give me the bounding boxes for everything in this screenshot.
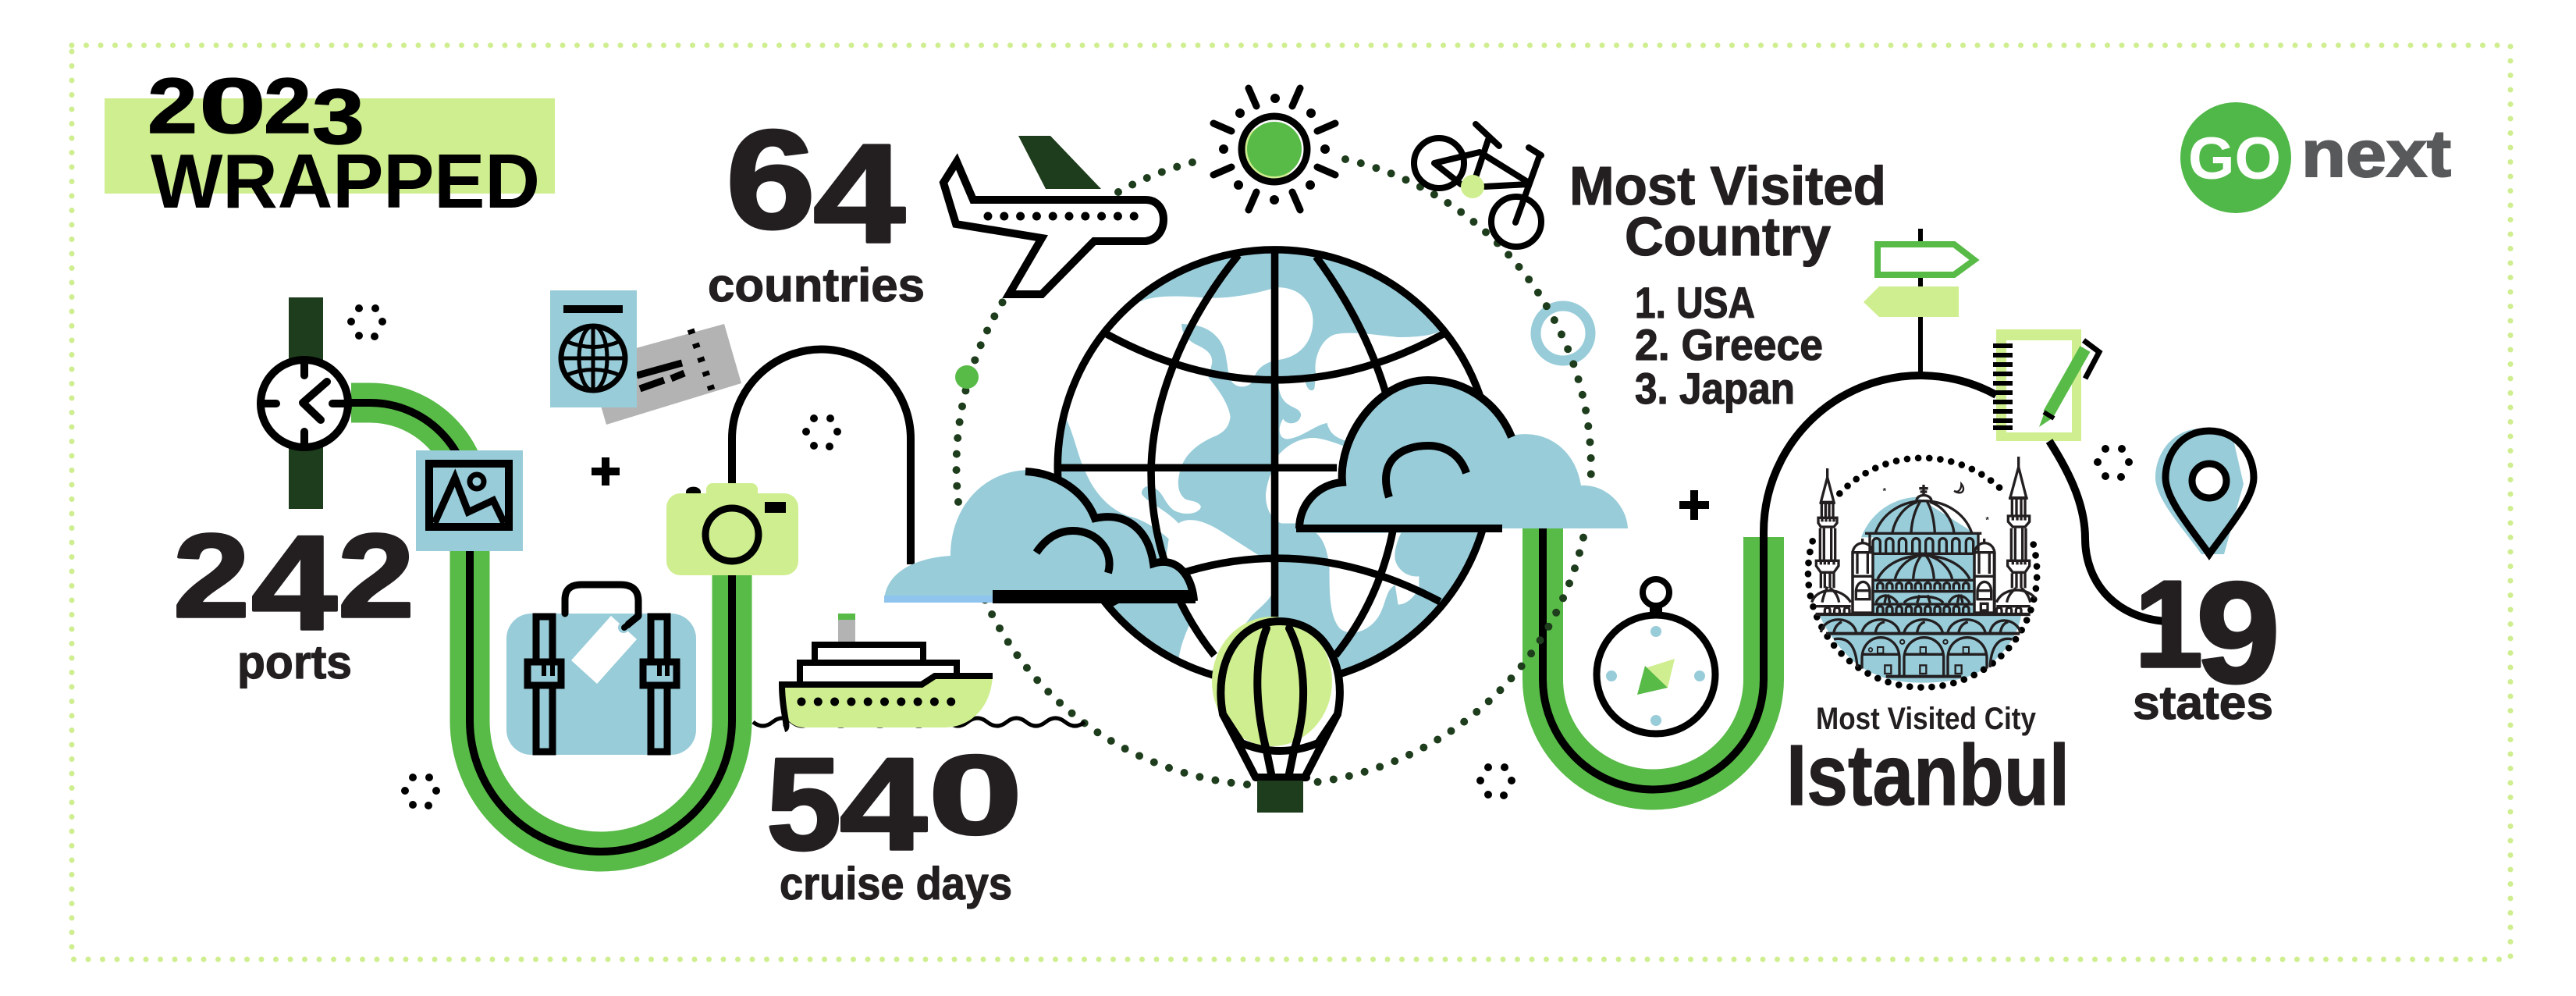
icon: Istanbul mosque: *: [1883, 487, 1887, 496]
text: most visited country list: [1569, 155, 1886, 413]
text: most visited city: Most Visited City: [1816, 702, 2037, 736]
black route over the camera: [732, 350, 911, 564]
icon: dots cluster: [347, 304, 386, 340]
title: 2023 Wrapped: 2: [264, 62, 311, 150]
logo: GO next: GO: [2188, 126, 2281, 192]
icon: passport: [550, 290, 637, 407]
right U-shaped green route: [1543, 375, 1996, 790]
text: most visited city: Istanbul: [1786, 727, 2070, 823]
plus sign: [592, 457, 620, 486]
logo: GO next: next: [2301, 117, 2451, 190]
icon: dots cluster: [802, 414, 841, 450]
left U-shaped green route: [351, 403, 732, 852]
icon: sun: [1213, 88, 1335, 210]
logo: GO next: [2180, 102, 2451, 213]
icon: watch: [261, 297, 348, 509]
title: 2023 Wrapped: WRAPPED: [151, 138, 540, 224]
icon: blue ring: [1536, 306, 1590, 361]
dotted orbit around globe: [957, 159, 1591, 784]
icon: dots cluster: [1476, 763, 1515, 799]
number: 64 countries: [708, 101, 925, 311]
text: most visited country list: Most Visited: [1569, 155, 1886, 216]
number: 19 states: 1: [2134, 556, 2203, 693]
text: most visited country list: 2. Greece: [1635, 320, 1823, 369]
icon: compass: [1597, 579, 1715, 734]
icon: bicycle: [1414, 124, 1541, 247]
number: 64 countries: 6: [726, 101, 815, 258]
icon: picture frame: [416, 450, 523, 551]
title: 2023 Wrapped: [105, 62, 555, 224]
text: most visited country list: 3. Japan: [1635, 364, 1795, 413]
number: 540 cruise days: 4: [840, 731, 927, 877]
text: most visited country list: 1. USA: [1635, 278, 1755, 327]
icon: suitcase: [506, 585, 696, 755]
number: 242 ports: ports: [237, 636, 352, 688]
text: most visited city: [1786, 702, 2070, 823]
number: 242 ports: [173, 508, 414, 688]
globe: [1053, 246, 1486, 679]
text: most visited country list: Country: [1625, 206, 1831, 267]
icon: lime bike pedal dot: [1461, 175, 1484, 198]
route to 19 states: [2049, 441, 2166, 621]
plus sign: [1679, 490, 1709, 520]
icon: map pin: [2155, 429, 2254, 554]
icon: ticket: [601, 324, 741, 425]
cloud: right: [1296, 380, 1628, 528]
icon: signpost: [1864, 229, 1974, 375]
cloud: left: [884, 470, 1196, 603]
icon: green orbit marker: [955, 365, 979, 389]
icon: hot air balloon: [1212, 617, 1340, 813]
icon: notepad and pen: [1993, 329, 2099, 441]
title: 2023 Wrapped: 2: [147, 62, 197, 150]
icon: airplane: [943, 136, 1164, 294]
icon: dots cluster: [2094, 445, 2133, 481]
number: 540 cruise days: 0: [929, 732, 1022, 858]
number: 540 cruise days: 5: [766, 731, 841, 877]
number: 19 states: 9: [2196, 552, 2280, 713]
number: 64 countries: countries: [708, 259, 925, 311]
number: 19 states: [2133, 552, 2280, 729]
icon: camera: [666, 483, 798, 575]
number: 64 countries: 4: [813, 116, 905, 272]
icon: Istanbul mosque: [1808, 457, 2037, 688]
number: 242 ports: 2: [338, 510, 414, 642]
title: 2023 Wrapped: 3: [312, 73, 364, 161]
number: 19 states: states: [2133, 677, 2273, 729]
icon: Istanbul mosque: *: [1985, 515, 1989, 525]
number: 540 cruise days: [766, 731, 1022, 909]
icon: dots cluster: [401, 774, 440, 809]
icon: cruise ship: [753, 614, 1085, 729]
number: 242 ports: 4: [251, 508, 337, 658]
number: 540 cruise days: cruise days: [780, 859, 1012, 909]
number: 242 ports: 2: [173, 510, 250, 642]
title: 2023 Wrapped: 0: [199, 62, 266, 150]
